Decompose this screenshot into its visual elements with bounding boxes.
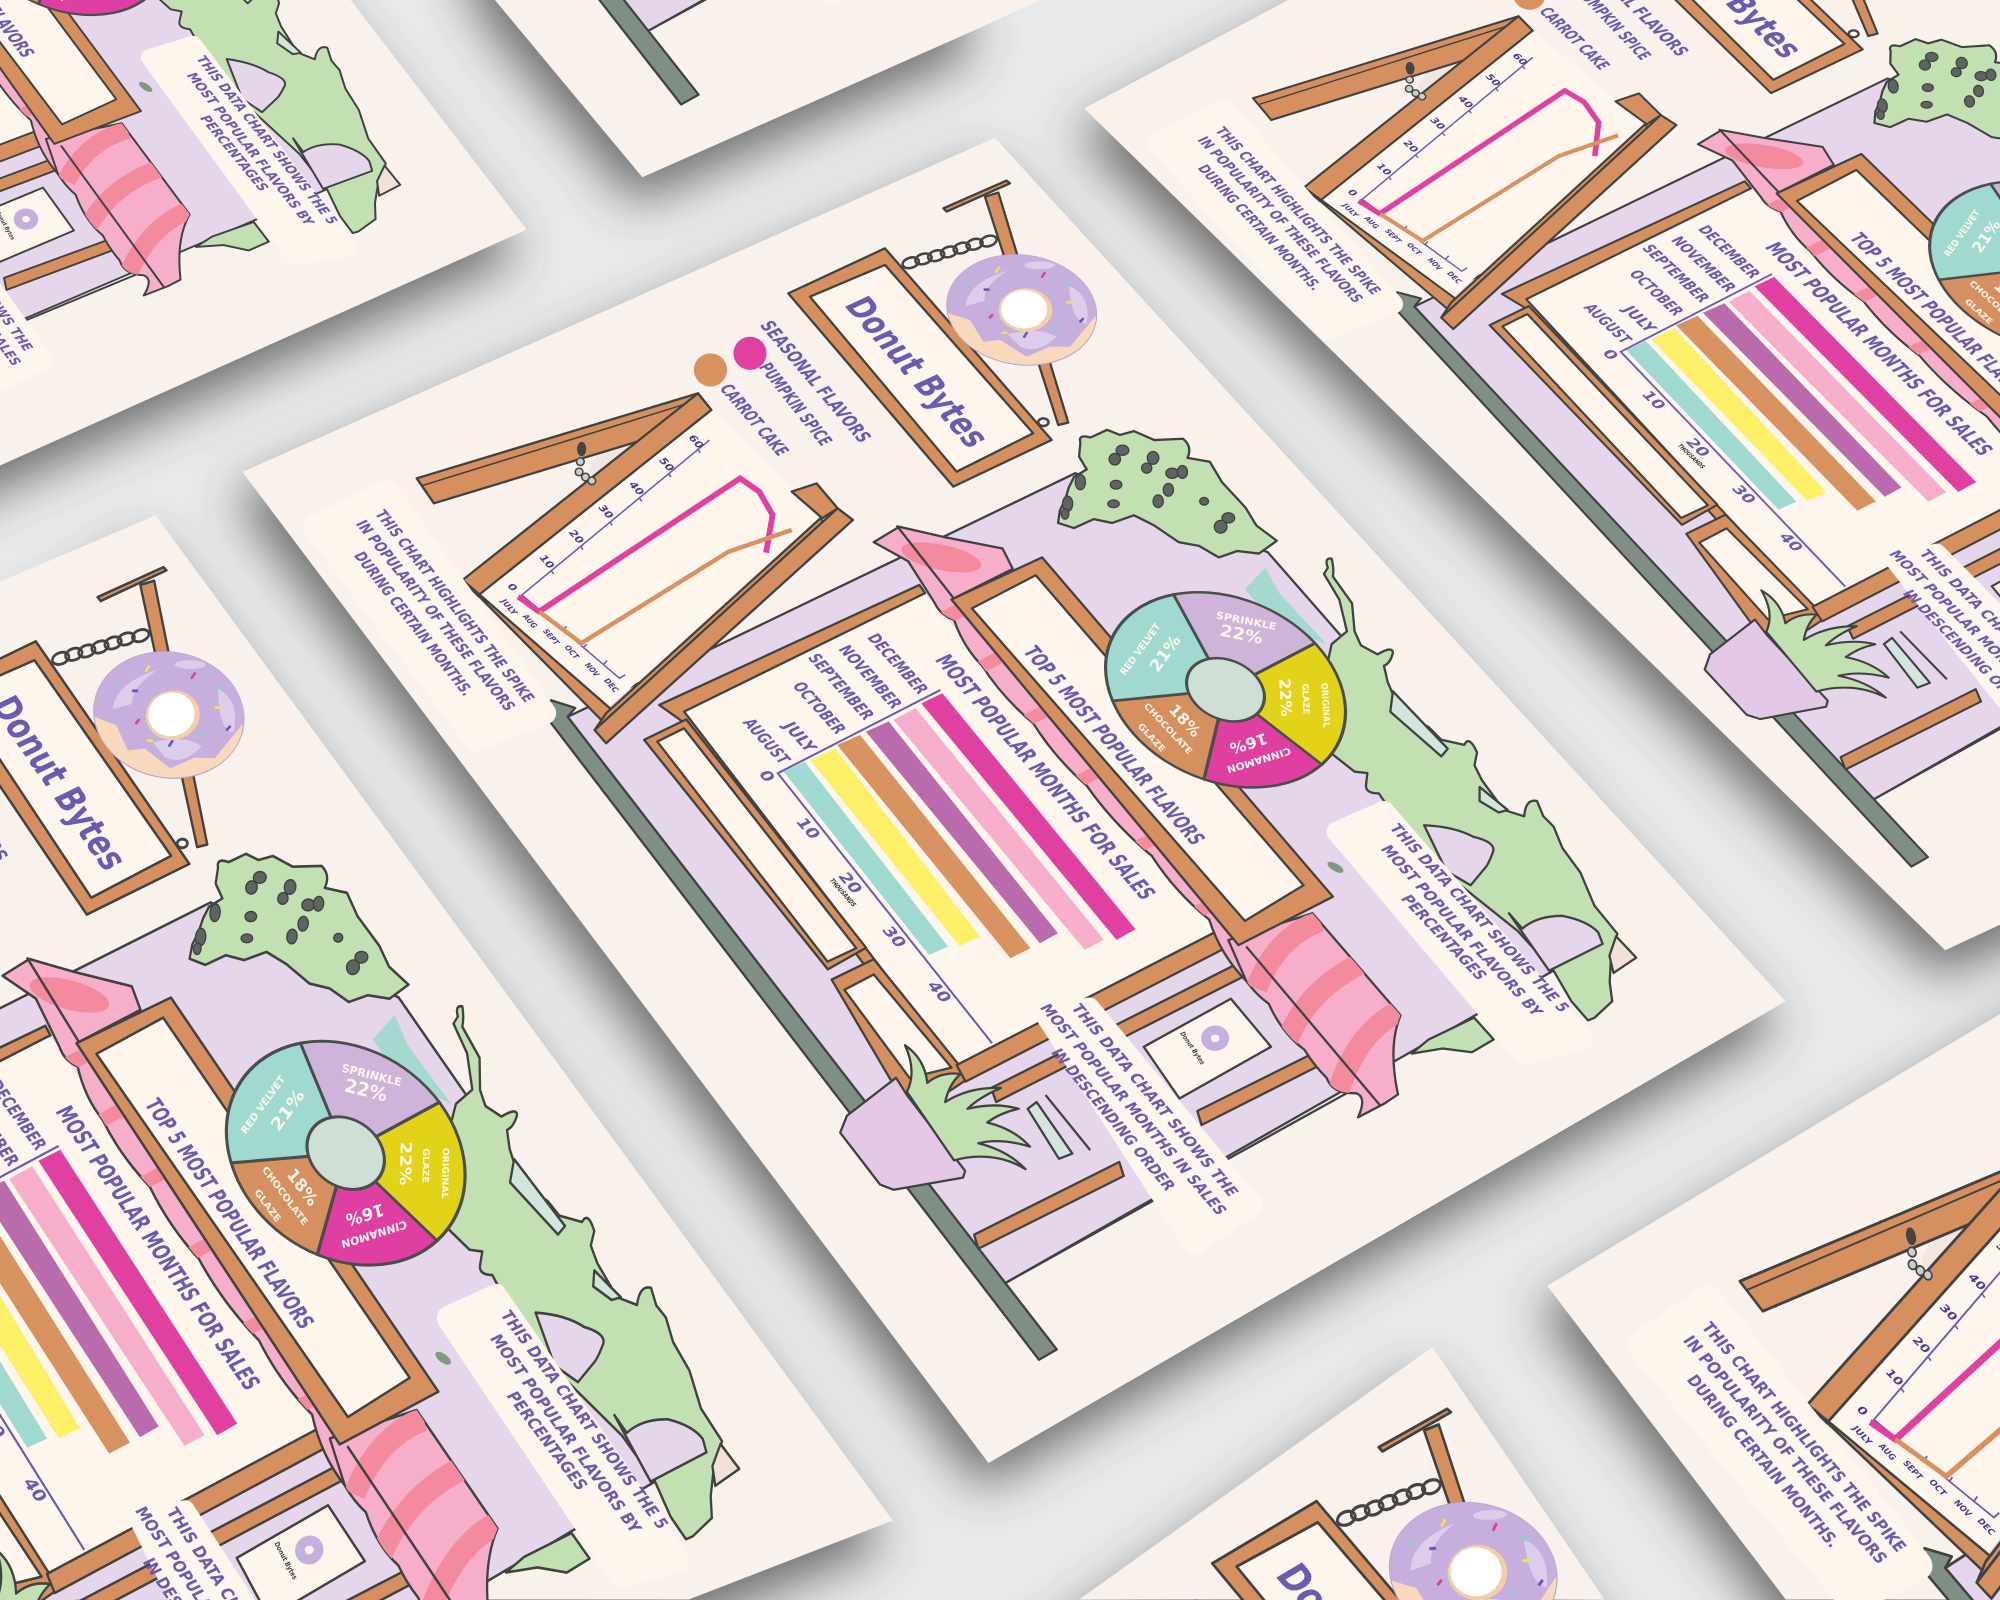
value axis labels: 30 bbox=[595, 503, 617, 520]
cinnamon label bbox=[1225, 729, 1292, 776]
month labels: AUG bbox=[520, 613, 540, 629]
donut icon bbox=[931, 230, 1116, 375]
window gap two in vine bbox=[1480, 787, 1508, 812]
sign title: Donut Bytes bbox=[835, 291, 999, 453]
caption: wheel note bbox=[1337, 811, 1583, 1055]
month labels: NOVEMBER bbox=[834, 643, 906, 711]
value labels: 10 bbox=[792, 815, 825, 841]
orange series bbox=[539, 530, 792, 643]
value labels: 30 bbox=[878, 923, 911, 950]
small framed window: Donut Bytes bbox=[1178, 1030, 1207, 1066]
month labels: OCT bbox=[562, 644, 582, 660]
tiny donut logo bbox=[1201, 1026, 1229, 1051]
bars bbox=[784, 693, 1136, 958]
month labels: AUGUST bbox=[738, 716, 794, 767]
small framed window bbox=[1144, 999, 1271, 1098]
legend: seasonal flavors bbox=[694, 318, 876, 459]
value axis labels bbox=[504, 433, 707, 593]
original glaze label: GLAZE bbox=[1299, 683, 1311, 715]
original glaze label: 22% bbox=[1276, 678, 1295, 717]
red velvet label bbox=[1118, 620, 1185, 678]
flavor wheel chart bbox=[1057, 559, 1394, 820]
caption: bar chart note: MOST POPULAR MONTHS IN SALES bbox=[1036, 1001, 1231, 1217]
vine lower part bbox=[1412, 1018, 1494, 1054]
legend: seasonal flavors: SEASONAL FLAVORS bbox=[755, 318, 876, 446]
legend: seasonal flavors: PUMPKIN SPICE bbox=[754, 360, 837, 449]
month labels: SEPT bbox=[541, 628, 562, 646]
caption: bar chart note: IN DESCENDING ORDER bbox=[1047, 1046, 1180, 1193]
magenta series bbox=[518, 478, 773, 612]
month labels: JULY bbox=[777, 718, 821, 756]
sprinkle label: 22% bbox=[1218, 622, 1265, 648]
wall base line bbox=[1005, 1092, 1349, 1283]
poster: main sheet bbox=[242, 138, 1786, 1463]
bar chart title: MOST POPULAR MONTHS FOR SALES bbox=[929, 651, 1161, 903]
poster: main content bbox=[315, 181, 1636, 1360]
value axis labels: 40 bbox=[626, 480, 647, 497]
month labels: JULY bbox=[498, 597, 520, 617]
top five panel frame bbox=[952, 557, 1333, 945]
month labels: SEPTEMBER bbox=[803, 651, 878, 723]
grey corner post bbox=[543, 700, 1057, 1360]
hanging sign post bbox=[943, 181, 1068, 425]
caption: line chart note: THIS CHART HIGHLIGHTS THE SPIKE bbox=[371, 507, 539, 705]
wheel segments bbox=[1057, 559, 1394, 820]
chocolate glaze label: 18% bbox=[1165, 701, 1204, 741]
caption: wheel note: THIS DATA CHART SHOWS THE 5 bbox=[1385, 821, 1574, 1014]
wall gap one in vine bbox=[1424, 825, 1493, 885]
window gap one in vine bbox=[1390, 691, 1448, 756]
month labels bbox=[498, 597, 621, 693]
poster: bottom centre copy bbox=[677, 1347, 2000, 1600]
lower window bbox=[832, 959, 969, 1116]
beige box bbox=[1609, 936, 1636, 973]
line chart bbox=[498, 433, 792, 693]
legend dot carrot cake bbox=[694, 353, 727, 386]
green bush with leaves bbox=[1058, 430, 1277, 557]
legend dot pumpkin spice bbox=[733, 337, 767, 370]
bar chart bbox=[738, 631, 1161, 1043]
value axis labels: 20 bbox=[565, 528, 587, 545]
bar chart axes bbox=[778, 690, 992, 1043]
caption: line chart note bbox=[315, 491, 545, 740]
A-frame line chart panel bbox=[480, 409, 816, 707]
A-frame hook chain bbox=[575, 443, 596, 485]
caption: line chart note: IN POPULARITY OF THESE FLAVORS bbox=[352, 517, 520, 713]
sign chain bbox=[901, 234, 1048, 426]
thousands axis title: THOUSANDS bbox=[827, 877, 859, 908]
left window bbox=[644, 719, 866, 969]
caption: wheel note: MOST POPULAR FLAVORS BY bbox=[1376, 842, 1548, 1019]
value labels: 20 bbox=[834, 869, 867, 896]
chocolate glaze label: CHOCOLATE bbox=[1141, 701, 1194, 757]
pale gap between sign beams bbox=[582, 440, 642, 490]
sign board bbox=[788, 248, 1052, 487]
large curtain drape bbox=[1228, 913, 1401, 1117]
bar chart cream panel bbox=[684, 593, 1222, 1071]
value labels: 40 bbox=[923, 978, 956, 1005]
caption: wheel note: PERCENTAGES bbox=[1397, 892, 1492, 982]
red velvet label: RED VELVET bbox=[1118, 620, 1164, 678]
poster: upper right copy bbox=[1084, 0, 2000, 950]
wavy curtain strip bbox=[874, 526, 1246, 981]
month labels: NOV bbox=[582, 661, 602, 678]
lilac shop wall bbox=[568, 473, 1607, 1283]
cinnamon label: 16% bbox=[1227, 729, 1269, 757]
caption: bar chart note: THIS DATA CHART SHOWS THE bbox=[1067, 1001, 1243, 1199]
value labels: 0 bbox=[754, 767, 780, 784]
green vine bbox=[1314, 559, 1617, 1020]
sprinkle label bbox=[1215, 609, 1277, 648]
sprinkle label: SPRINKLE bbox=[1215, 609, 1277, 633]
value axis labels: 10 bbox=[536, 553, 558, 570]
plant leaves bbox=[905, 1045, 1030, 1169]
value axis labels: 60 bbox=[685, 433, 707, 450]
teal shape behind wheel bbox=[1245, 568, 1327, 644]
red velvet label: 21% bbox=[1146, 632, 1185, 676]
original glaze label: ORIGINAL bbox=[1319, 683, 1331, 728]
plant pot bbox=[840, 1078, 965, 1190]
wheel heading: TOP 5 MOST POPULAR FLAVORS bbox=[1017, 643, 1210, 848]
value axis labels: 50 bbox=[656, 456, 677, 473]
legend: seasonal flavors: CARROT CAKE bbox=[715, 381, 794, 459]
month labels bbox=[738, 631, 932, 767]
wall gap two in vine bbox=[1509, 913, 1603, 971]
curtain strip stripes bbox=[899, 536, 1224, 921]
small leaf bbox=[1326, 860, 1345, 875]
value axis labels: 0 bbox=[504, 582, 520, 593]
month labels: DECEMBER bbox=[862, 631, 932, 697]
caption: line chart note: DURING CERTAIN MONTHS. bbox=[350, 549, 478, 698]
poster: lower left copy bbox=[0, 515, 893, 1600]
month labels: DEC bbox=[602, 677, 621, 693]
bar chart panel frame bbox=[659, 585, 960, 1079]
month labels: OCTOBER bbox=[788, 679, 850, 737]
line chart axes bbox=[522, 440, 709, 678]
value labels bbox=[754, 767, 956, 1005]
brown wall rails bbox=[957, 927, 1325, 1249]
chocolate glaze label: GLAZE bbox=[1135, 721, 1167, 754]
A-frame sign posts bbox=[417, 393, 853, 743]
poster: top centre copy bbox=[0, 0, 1267, 177]
poster: lower right copy bbox=[1547, 848, 2000, 1600]
cinnamon label: CINNAMON bbox=[1225, 745, 1292, 776]
poster: upper left copy bbox=[0, 0, 527, 517]
original glaze label bbox=[1276, 678, 1331, 728]
door handle bbox=[1028, 1095, 1090, 1159]
